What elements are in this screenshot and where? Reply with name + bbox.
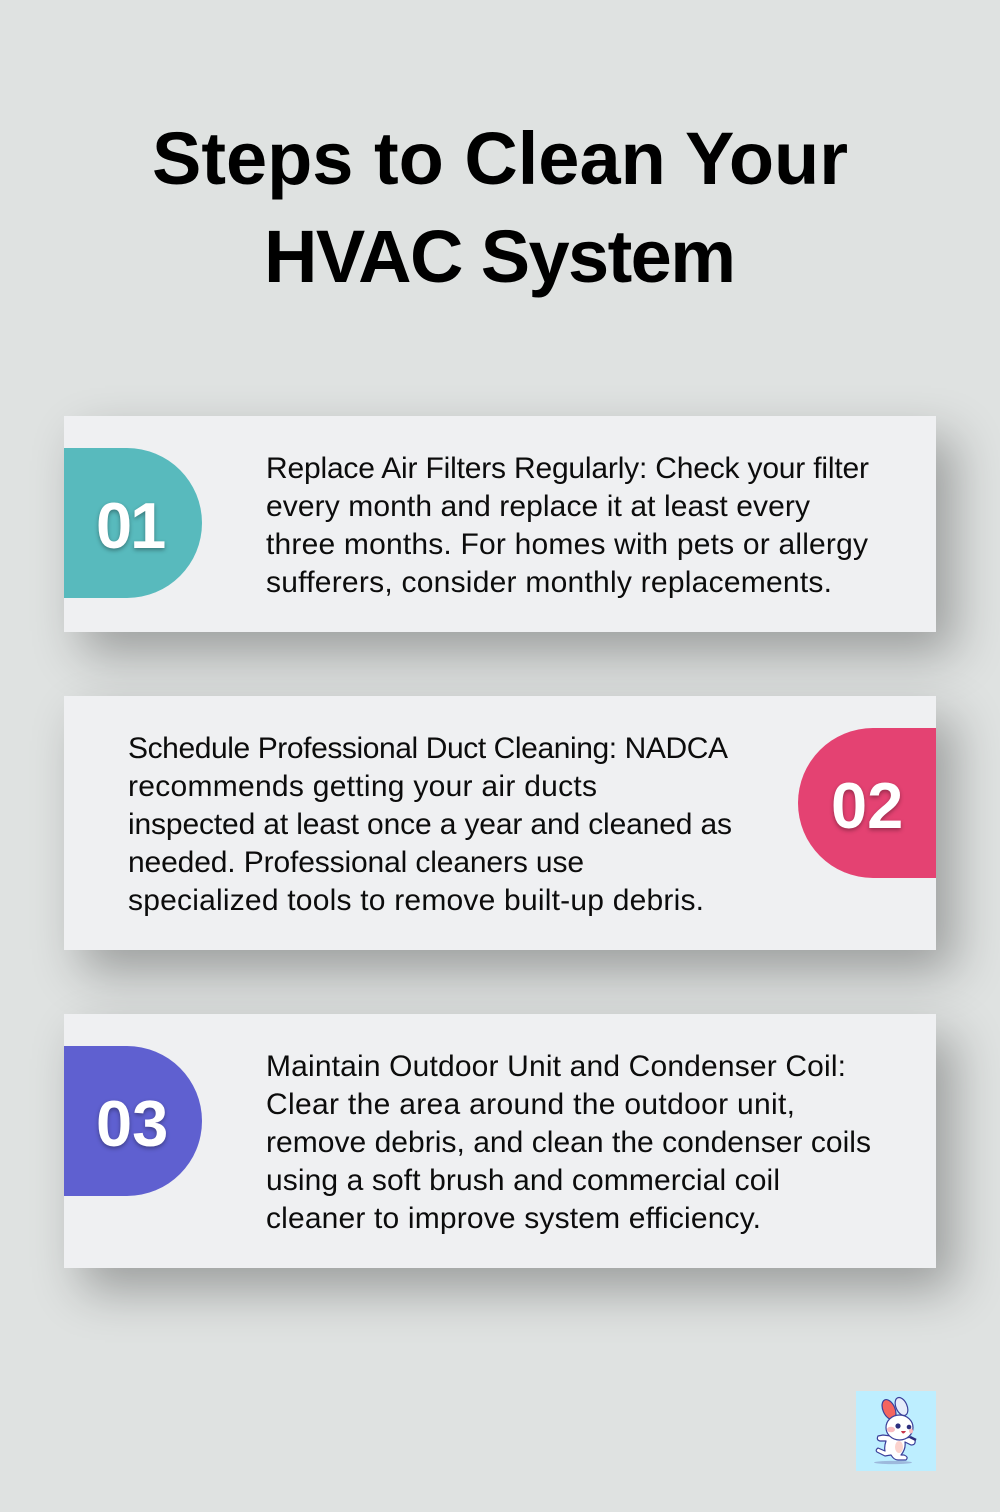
number 02: 02 bbox=[831, 769, 903, 842]
step 01 text: three months. For homes with pets or allergy bbox=[266, 528, 868, 561]
step 03 number badge bbox=[64, 1046, 202, 1196]
step 02 text: recommends getting your air ducts bbox=[128, 770, 597, 803]
step 03 text: cleaner to improve system efficiency. bbox=[266, 1202, 761, 1235]
step 02 text bbox=[128, 732, 732, 917]
step 02 text: Schedule Professional Duct Cleaning: NADCA bbox=[128, 732, 728, 765]
step 01 text bbox=[266, 452, 869, 599]
step 01 text: Replace Air Filters Regularly: Check your filter bbox=[266, 452, 869, 485]
step 02 text: needed. Professional cleaners use bbox=[128, 846, 584, 879]
step 03 text bbox=[266, 1050, 871, 1235]
step 02 text: inspected at least once a year and cleaned as bbox=[128, 808, 732, 841]
step 01 text: every month and replace it at least every bbox=[266, 490, 810, 523]
title: Steps to Clean Your bbox=[152, 117, 848, 200]
number 01: 01 bbox=[96, 489, 164, 562]
icon: running bunny logo bbox=[856, 1391, 936, 1471]
step 01 number badge bbox=[64, 448, 202, 598]
step 01 text: sufferers, consider monthly replacements. bbox=[266, 566, 832, 599]
step 03 text: using a soft brush and commercial coil bbox=[266, 1164, 780, 1197]
step 02 number badge bbox=[798, 728, 936, 878]
panel: step 03 bbox=[64, 1014, 936, 1268]
title: HVAC System bbox=[264, 215, 736, 298]
panel: step 01 bbox=[64, 416, 936, 632]
step 02 text: specialized tools to remove built-up debris. bbox=[128, 884, 704, 917]
number 03: 03 bbox=[96, 1087, 168, 1160]
step 03 text: Clear the area around the outdoor unit, bbox=[266, 1088, 795, 1121]
panel: step 02 bbox=[64, 696, 936, 950]
title bbox=[152, 117, 848, 298]
step 03 text: remove debris, and clean the condenser coils bbox=[266, 1126, 871, 1159]
step 03 text: Maintain Outdoor Unit and Condenser Coil: bbox=[266, 1050, 846, 1083]
